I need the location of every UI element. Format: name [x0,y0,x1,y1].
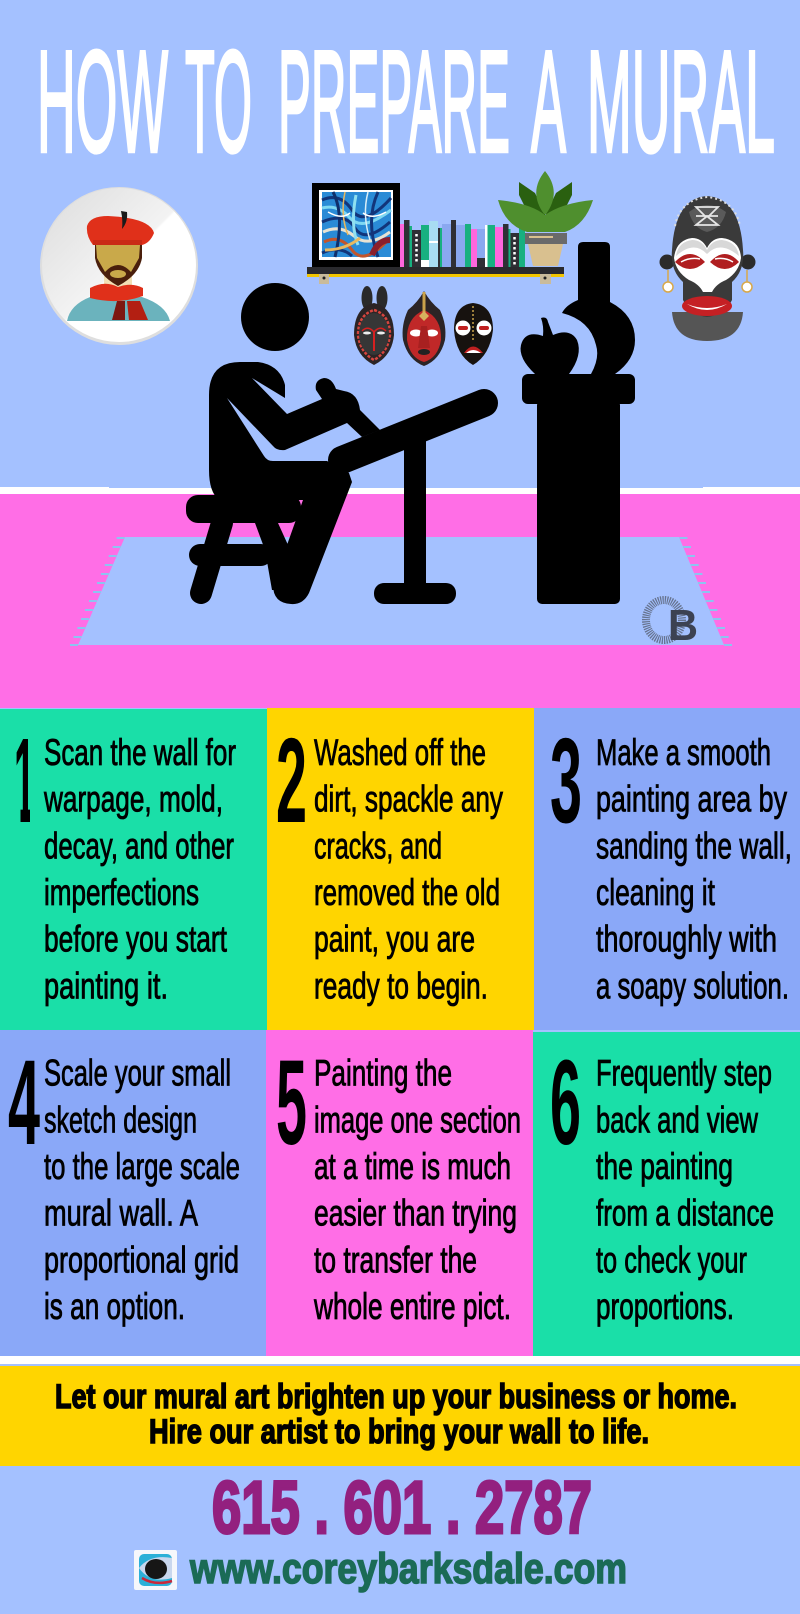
panel: step 4: sketch design [44,1099,197,1140]
easel board [342,403,484,460]
panel: step 3: 3 [550,712,582,848]
callout: hire the artist: Hire our artist to bring your wall to life. [149,1413,649,1451]
rug [70,537,732,645]
panel: step 3: cleaning it [596,872,716,913]
panel: step 5: 5 [276,1034,307,1170]
icon: eye logo [134,1550,177,1590]
panel: step 1: before you start [44,919,228,960]
easel stand [374,440,456,604]
panel: step 6: proportions. [596,1286,734,1327]
icon: mask one [354,286,394,365]
panel: step 5: image one section [314,1099,521,1140]
panel: step 4: 4 [8,1034,40,1170]
icon: artist avatar [40,187,198,345]
panel: step 5: whole entire pict. [313,1286,511,1327]
panel: step 6 [533,1032,800,1356]
panel: step 1: 1 [14,712,35,848]
apple [521,318,579,374]
title: TO [185,20,252,182]
panel: step 5: Painting the [314,1053,452,1094]
title [37,20,775,182]
panel: step 2: dirt, spackle any [314,779,503,820]
panel: step 4: mural wall. A [44,1193,198,1234]
icon: mask two [403,291,445,366]
panel: step 4: is an option. [44,1286,185,1327]
website: www.coreybarksdale.com [189,1545,627,1593]
framed painting [312,183,400,267]
white divider strip [0,1356,800,1364]
floor with skirting board [0,487,800,708]
panel: step 5: to transfer the [314,1239,477,1280]
panel: step 4 [0,1030,266,1356]
title: HOW [37,20,168,182]
head [241,283,309,351]
phone number: 615 . 601 . 2787 [212,1466,592,1549]
title: A [531,20,566,182]
potted plant [498,171,593,266]
bust sculpture [562,242,635,374]
panel: step 4: to the large scale [44,1146,240,1187]
panel: step 2: paint, you are [314,919,475,960]
panel: step 4: proportional grid [44,1239,239,1280]
shelf [307,171,593,284]
panel: step 2: ready to begin. [314,965,488,1006]
panel: step 6: 6 [550,1034,581,1170]
silhouette: seated artist at easel with bust [186,242,635,604]
icon: mask three [454,303,493,365]
panel: step 1: warpage, mold, [43,779,223,820]
panel: step 1 [0,709,267,1030]
panel: step 3 [534,708,800,1030]
panel: step 5 [266,1030,533,1356]
panel: step 5: at a time is much [314,1146,511,1187]
panel: step 4: Scale your small [44,1053,231,1094]
panel: step 1: Scan the wall for [44,732,236,773]
panel: step 1: imperfections [44,872,199,913]
panel: step 6: the painting [596,1146,733,1187]
panel: step 1: painting it. [44,965,168,1006]
body and arm [209,362,380,604]
panel: step 2 [267,708,534,1030]
panel: step 5: easier than trying [314,1193,517,1234]
pedestal [522,374,635,604]
icon: large chokwe mask [660,196,756,341]
books [400,220,525,267]
panel: step 2: Washed off the [314,732,486,773]
panel: step 2: removed the old [314,872,500,913]
panel: step 2: 2 [276,712,307,848]
logo: CB monogram: B [668,601,698,650]
stool [186,495,301,593]
logo: CB monogram [646,600,698,650]
panel: step 1: decay, and other [44,825,234,866]
panel: step 2: cracks, and [314,825,442,866]
shelf board [307,267,564,284]
callout: hire the artist [0,1366,800,1466]
